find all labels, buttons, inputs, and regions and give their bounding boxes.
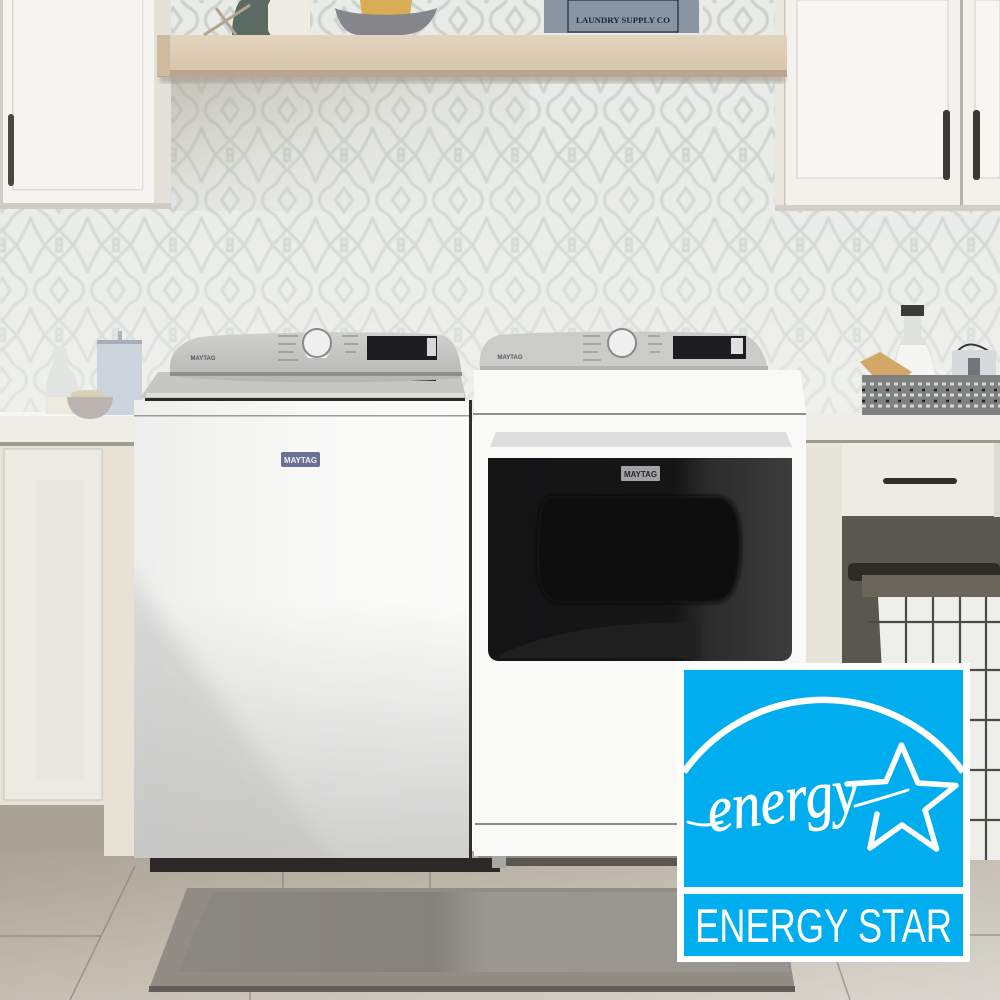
drawer with pull handle [842,443,1000,519]
glass bottle [46,348,78,414]
glass lid [140,372,466,401]
items on right counter [860,305,1000,415]
wooden shelf [157,35,787,83]
wooden brush [860,352,912,378]
badge white frame [677,663,970,962]
left counter and lower cabinet [0,412,136,851]
washer control panel [170,329,462,382]
door handle recess [490,432,792,447]
decor: dark vase with sticks [204,0,270,35]
right counter and lower cabinet [806,413,1000,860]
milk bottle [893,305,935,378]
washer control panel: MAYTAG [190,356,216,362]
decor: bottle [268,0,310,35]
washer [104,329,472,870]
dryer control panel [480,329,768,370]
maytag badge [621,466,660,481]
maytag badge: MAYTAG [284,456,317,465]
upper right cabinet [775,0,1000,211]
blue canister [97,331,142,415]
script energy wordmark: energy [702,753,863,847]
small bowl [67,390,113,419]
wire hamper [848,563,1000,860]
dryer [473,329,806,868]
lidded jar [952,344,996,377]
washer post [104,446,136,856]
floor rug [148,888,795,992]
metal basket [862,375,1000,415]
digital display [673,336,746,359]
dryer door [488,458,792,661]
decor: laundry supply sign: LAUNDRY SUPPLY CO [576,15,670,25]
shadow under appliances [150,858,500,872]
floor [0,851,1000,1000]
cabinet handles [943,110,980,180]
cabinet door [4,449,102,800]
washer body [120,400,472,870]
shelf decor [204,0,703,35]
patterned wall [0,0,1000,420]
dryer control panel: MAYTAG [497,355,523,361]
items on left counter [46,331,142,419]
decor: stone bowl with sponge [335,0,437,35]
maytag badge [281,452,320,467]
badge blue field [684,670,963,887]
dryer body [473,370,806,868]
digital display [367,336,437,360]
maytag badge: MAYTAG [624,470,657,479]
decor: laundry supply sign [541,0,703,35]
upper left cabinet [0,0,171,209]
recessed toe kick [0,805,105,851]
control knob [608,329,636,357]
control knob [303,329,331,358]
badge arc [684,700,963,772]
ENERGY STAR badge [677,663,970,962]
star outline [847,745,956,849]
